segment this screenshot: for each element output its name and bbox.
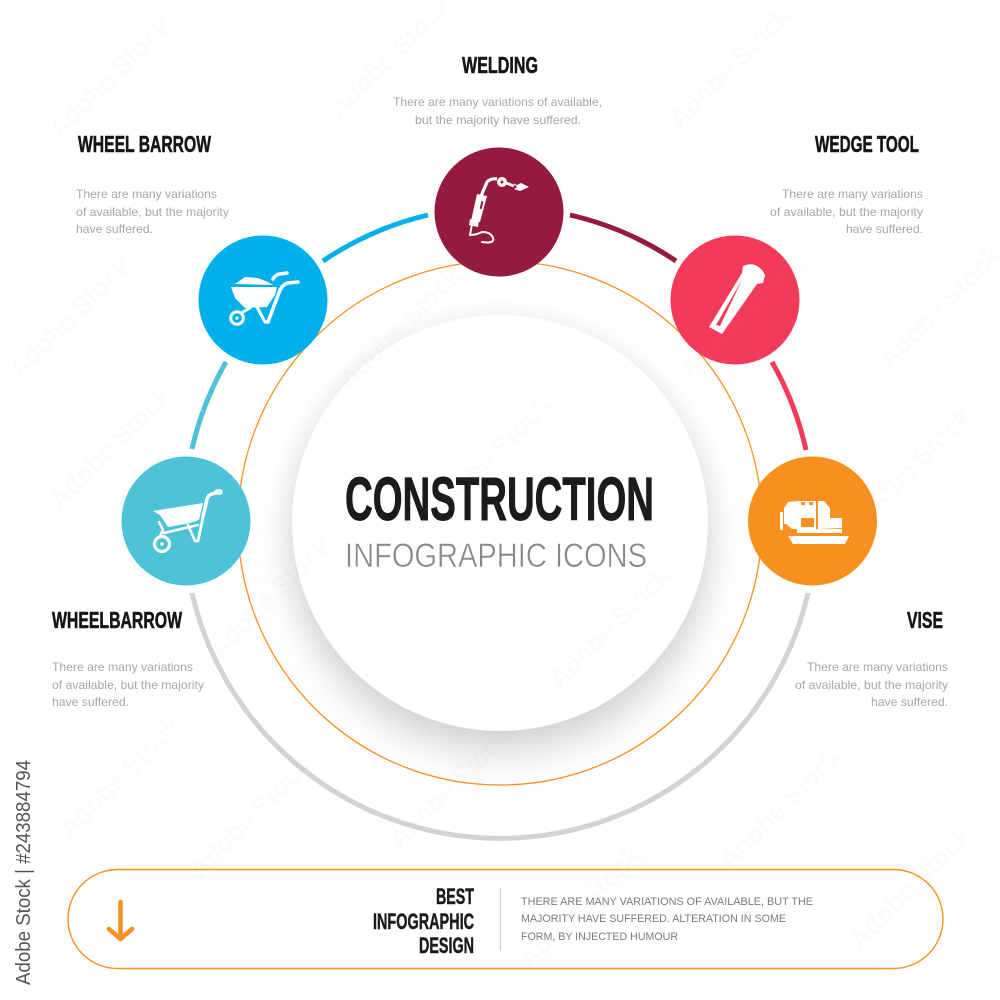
node: wedge tool (670, 236, 800, 364)
icon: wheelbarrow (153, 492, 220, 552)
watermarks: Adobe Stock (843, 820, 977, 954)
watermarks: Adobe Stock (3, 250, 137, 384)
watermarks: Adobe Stock (663, 0, 797, 134)
label: welding: but the majority have suffered. (415, 113, 581, 127)
label: vise (795, 607, 948, 709)
label: wedge tool: of available, but the majority (770, 205, 923, 219)
watermarks: Adobe Stock (43, 10, 177, 144)
title: CONSTRUCTION (345, 465, 654, 533)
label: welding: WELDING (462, 52, 538, 78)
stock id side label: Adobe Stock | #243884794 (13, 760, 35, 985)
label: vise: VISE (907, 607, 943, 633)
watermarks: Adobe Stock (333, 260, 467, 394)
icon: wedge tool (709, 264, 765, 334)
bottom banner (68, 870, 943, 968)
label: wheelbarrow (52, 607, 204, 709)
subtitle: INFOGRAPHIC ICONS (345, 537, 647, 575)
label: wheelbarrow: have suffered. (52, 695, 129, 709)
node: vise (748, 456, 877, 586)
central circle with shadow (286, 309, 714, 755)
icon: vise (780, 501, 849, 544)
watermarks: Adobe Stock (183, 750, 317, 884)
node: welding (434, 148, 564, 276)
watermarks: Adobe Stock (513, 840, 647, 974)
watermarks: Adobe Stock (543, 560, 677, 694)
watermarks: Adobe Stock (43, 380, 177, 514)
icon: down arrow (109, 902, 132, 939)
banner heading: INFOGRAPHIC (373, 909, 474, 934)
banner text: MAJORITY HAVE SUFFERED. ALTERATION IN SOME (521, 913, 786, 925)
watermarks: Adobe Stock (53, 710, 187, 844)
label: wedge tool: There are many variations (782, 187, 923, 201)
banner text: THERE ARE MANY VARIATIONS OF AVAILABLE, BUT THE (521, 896, 813, 908)
icon: welding torch (469, 177, 529, 242)
banner text (521, 896, 813, 943)
label: welding (393, 52, 602, 127)
label: vise: have suffered. (871, 695, 948, 709)
label: wheel barrow: of available, but the majority (76, 205, 229, 219)
node: wheel barrow (198, 236, 328, 364)
label: wheel barrow (76, 131, 229, 236)
label: wheelbarrow: WHEELBARROW (52, 607, 182, 633)
watermarks: Adobe Stock (673, 250, 807, 384)
orange inner ring (238, 261, 762, 785)
banner heading: BEST (436, 884, 474, 909)
watermarks: Adobe Stock (713, 740, 847, 874)
label: wheel barrow: There are many variations (76, 187, 217, 201)
banner heading (373, 884, 474, 958)
watermarks: Adobe Stock (843, 400, 977, 534)
label: vise: of available, but the majority (795, 678, 948, 692)
banner text: FORM, BY INJECTED HUMOUR (521, 931, 678, 943)
label: wheelbarrow: of available, but the majority (52, 678, 204, 692)
label: wedge tool (770, 131, 923, 236)
label: welding: There are many variations of available, (393, 95, 602, 109)
icon: wheel barrow (231, 273, 298, 324)
label: wedge tool: WEDGE TOOL (815, 131, 919, 157)
banner heading: DESIGN (419, 933, 474, 958)
label: wheel barrow: WHEEL BARROW (78, 131, 211, 157)
label: vise: There are many variations (807, 660, 948, 674)
label: wheelbarrow: There are many variations (52, 660, 193, 674)
label: wedge tool: have suffered. (846, 222, 923, 236)
node: wheelbarrow (122, 456, 250, 586)
label: wheel barrow: have suffered. (76, 222, 153, 236)
watermarks: Adobe Stock (203, 530, 337, 664)
watermarks: Adobe Stock (423, 390, 557, 524)
outer ring segments (192, 215, 808, 838)
watermarks: Adobe Stock (383, 720, 517, 854)
